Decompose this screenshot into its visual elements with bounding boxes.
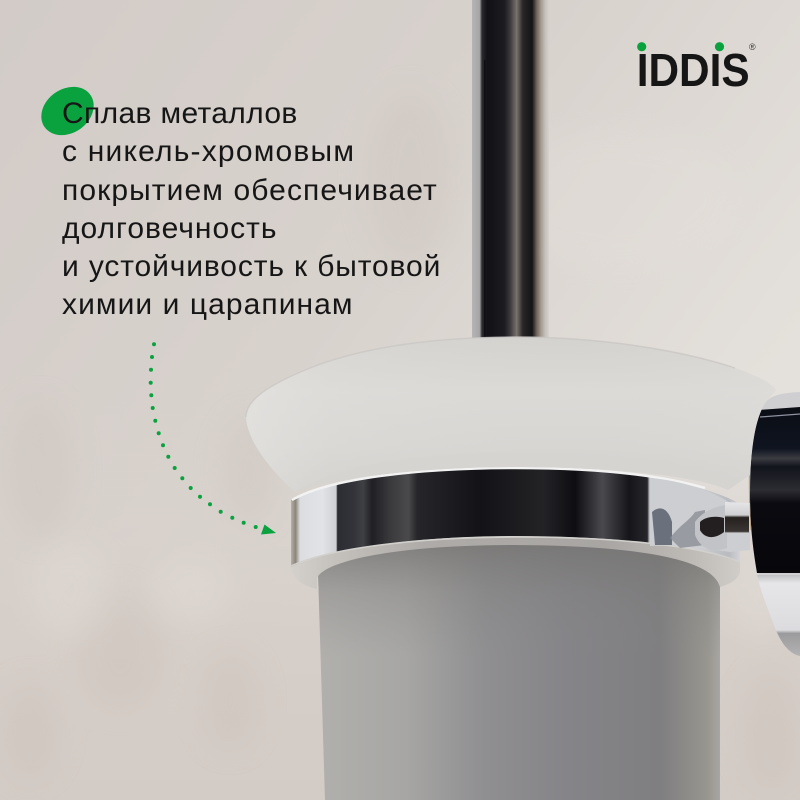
chrome brush rod: [472, 0, 549, 345]
main text block: долговечность: [62, 212, 278, 245]
frosted glass cup body: [317, 540, 720, 800]
main text block: Сплав металлов: [62, 97, 298, 130]
logo: IDDIS: ®: [749, 42, 756, 52]
main text block: с никель‑хромовым: [62, 135, 355, 168]
main text block: и устойчивость к бытовой: [62, 250, 441, 283]
frosted glass lip below the ring: [291, 537, 740, 589]
main text block: химии и царапинам: [62, 288, 354, 321]
chrome ring: [291, 468, 742, 567]
wall mount disc: [749, 392, 800, 656]
main text block: [62, 97, 441, 321]
main text block: покрытием обеспечивает: [62, 174, 438, 207]
chrome connector arm: [650, 478, 750, 552]
frosted glass dish: [246, 337, 776, 492]
